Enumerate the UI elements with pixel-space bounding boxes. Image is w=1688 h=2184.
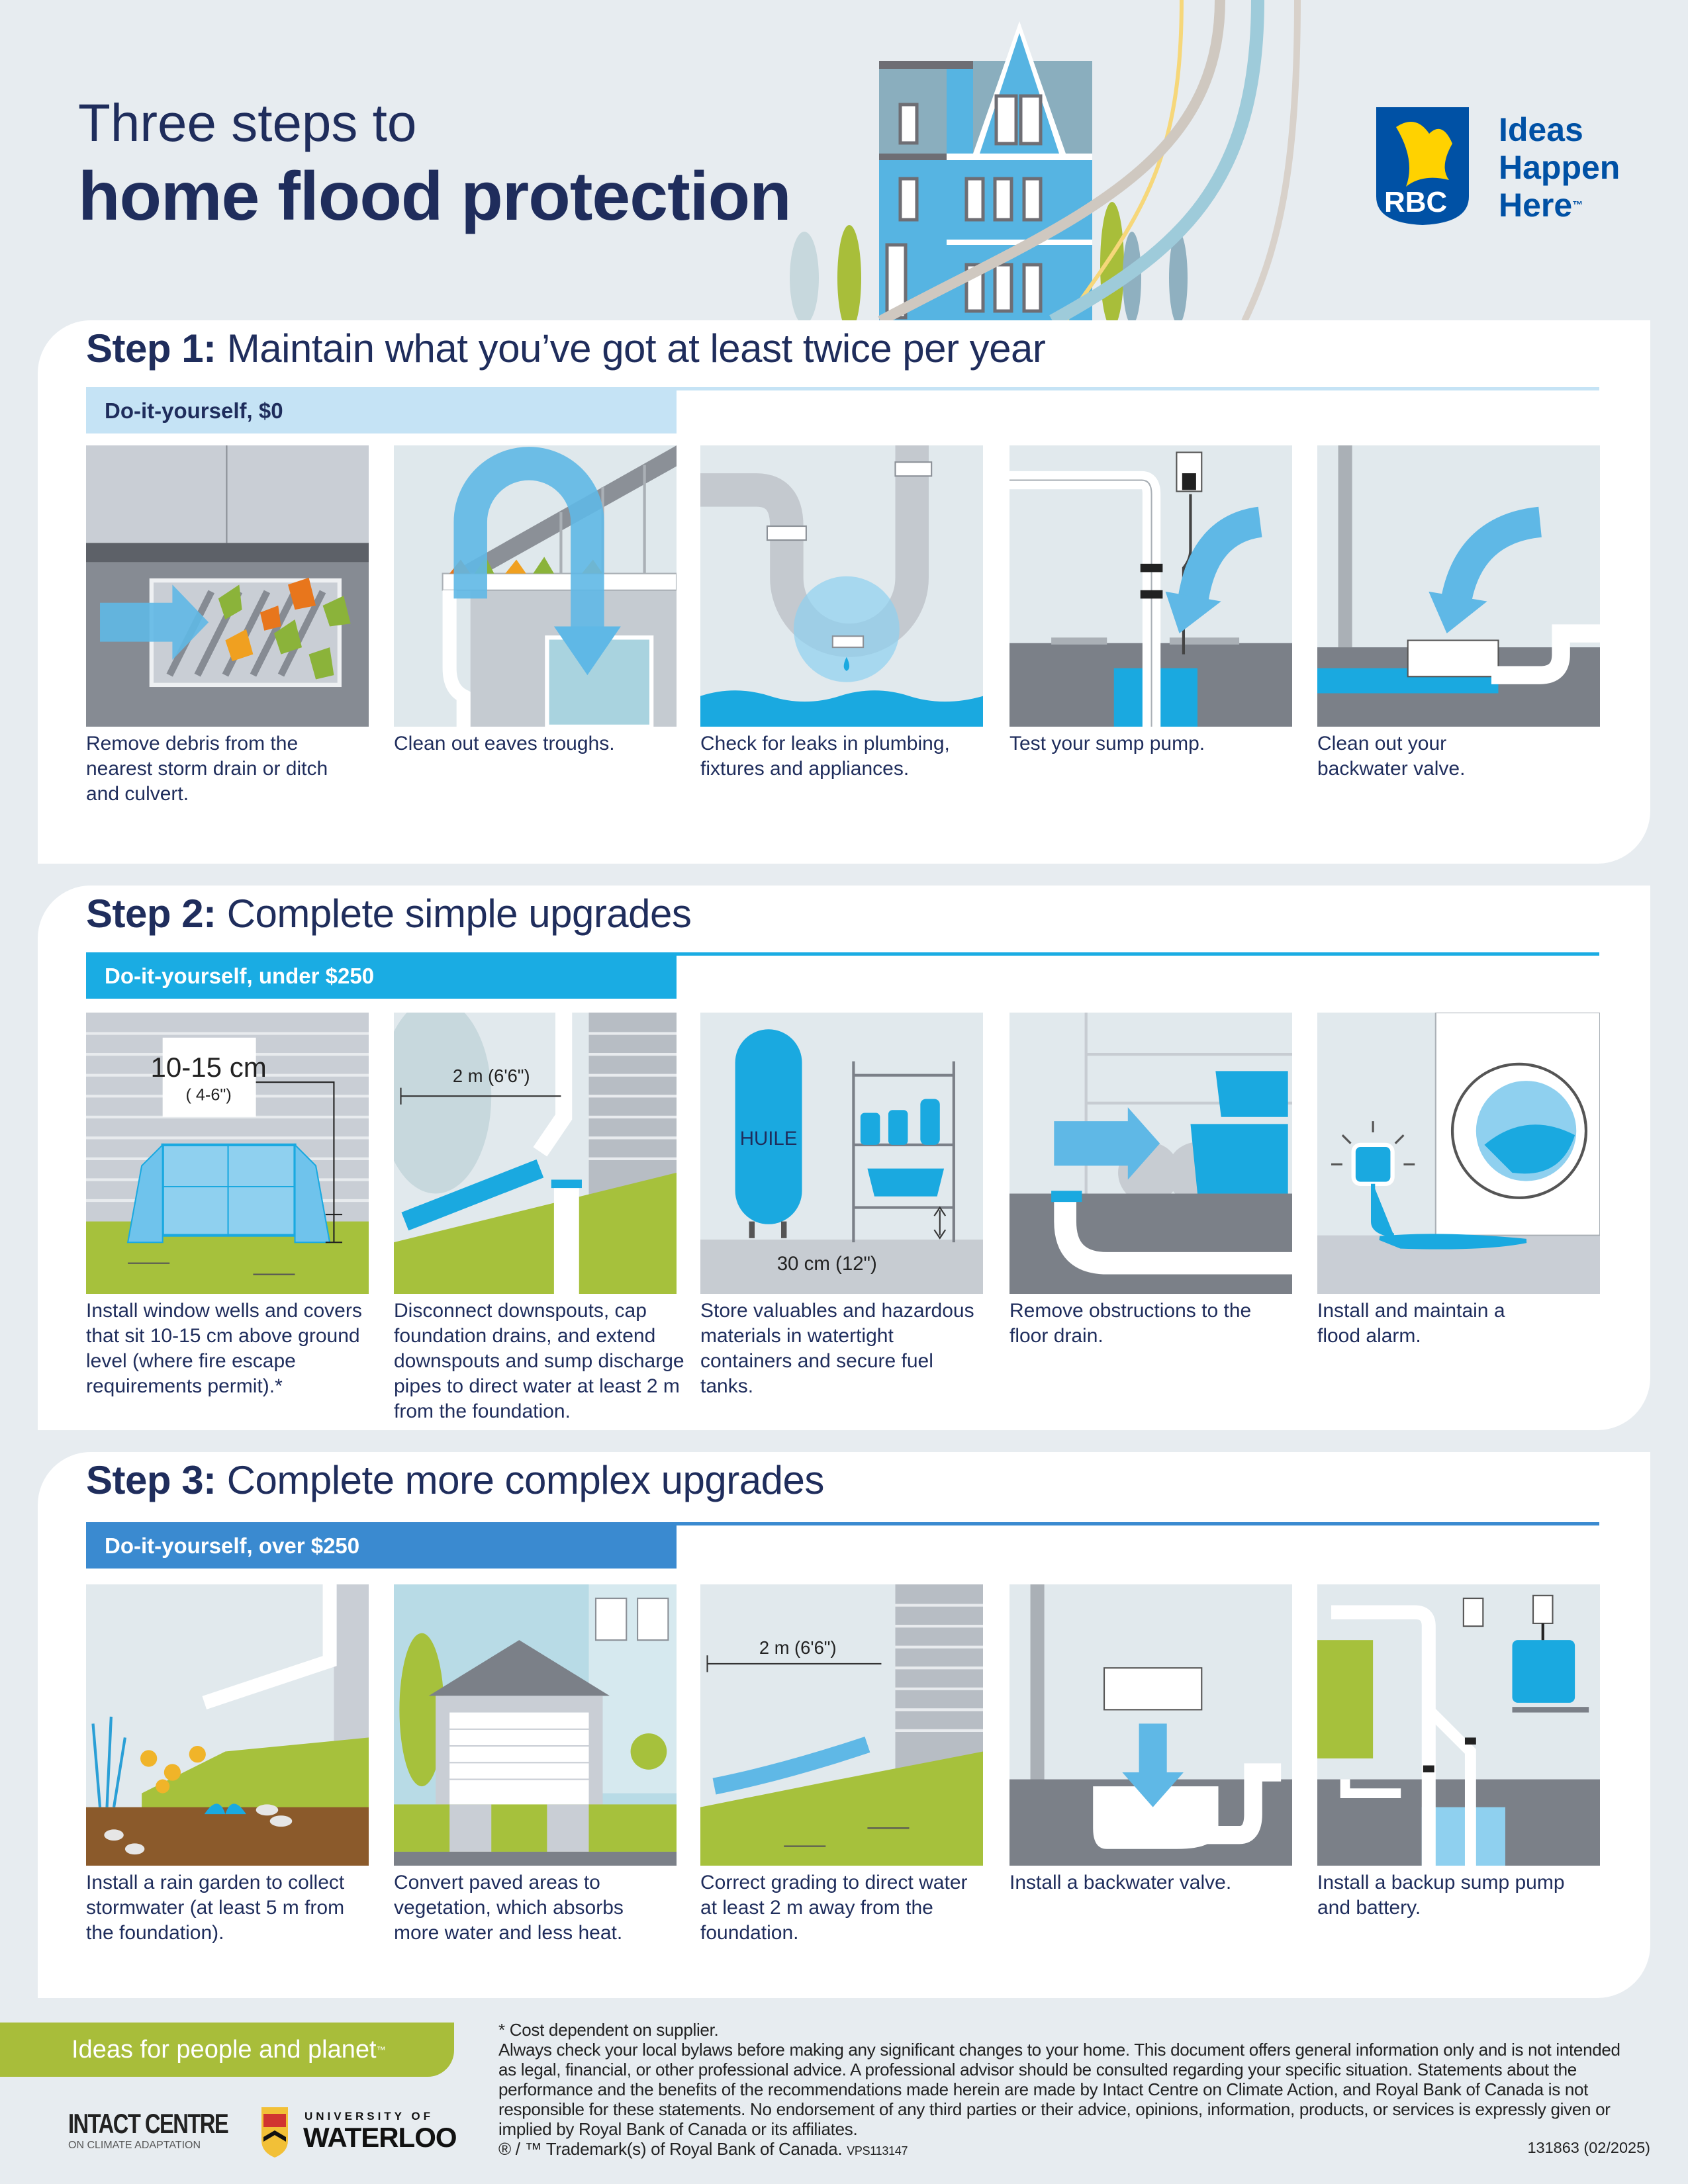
caption: Store valuables and hazardous materials in watertight containers and secure fuel tanks. xyxy=(700,1300,974,1397)
caption: Install window wells and covers that sit 10-15 cm above ground level (where fire escape requirements permit).* xyxy=(86,1300,362,1397)
logo: RBC: Happen xyxy=(1499,149,1620,186)
caption: Clean out your backwater valve. xyxy=(1317,733,1465,780)
caption: Install a backwater valve. xyxy=(1009,1872,1231,1893)
tile: rain garden xyxy=(86,1584,369,1866)
tile: downspouts: 2 m (6'6") xyxy=(453,1066,530,1086)
caption: Install and maintain a flood alarm. xyxy=(1317,1300,1505,1347)
caption: Check for leaks in plumbing, fixtures and appliances. xyxy=(700,733,950,780)
logo: RBC xyxy=(1376,107,1620,225)
tile: sump pump xyxy=(1009,445,1292,727)
tile: window wells: ( 4-6") xyxy=(185,1086,232,1105)
panel: step 2 xyxy=(38,886,1650,1430)
caption: Remove obstructions to the floor drain. xyxy=(1009,1300,1251,1347)
tile: plumbing leaks xyxy=(700,445,983,727)
logo: RBC: Here™ xyxy=(1499,187,1583,224)
heading: step 1: Step 1: Maintain what you’ve got at least twice per year xyxy=(86,326,1045,371)
tile: backup sump pump xyxy=(1317,1584,1600,1866)
tile: grading xyxy=(700,1584,983,1866)
logo: University of Waterloo: UNIVERSITY OF xyxy=(305,2110,434,2122)
caption: Clean out eaves troughs. xyxy=(394,733,615,754)
title: home flood protection xyxy=(78,158,791,235)
title xyxy=(78,93,791,235)
caption: Disconnect downspouts, cap foundation drains, and extend downspouts and sump discharge pipes to direct water at least 2 m from the foundation. xyxy=(394,1300,684,1422)
tile: window wells: 10-15 cm xyxy=(150,1052,267,1083)
fine print: ® / ™ Trademark(s) of Royal Bank of Canada. VPS113147 xyxy=(498,2139,908,2159)
tile: downspouts xyxy=(394,1013,677,1294)
footer tagline tab: Ideas for people and planet™ xyxy=(71,2036,386,2064)
logo: Intact Centre: INTACT CENTRE xyxy=(68,2108,228,2139)
tile: eaves troughs xyxy=(394,445,677,727)
heading: step 3: Step 3: Complete more complex upgrades xyxy=(86,1458,824,1502)
logo: Intact Centre: ON CLIMATE ADAPTATION xyxy=(68,2140,201,2151)
logo: RBC: RBC xyxy=(1384,186,1447,218)
caption: Remove debris from the nearest storm drain or ditch and culvert. xyxy=(86,733,328,805)
document code: 131863 (02/2025) xyxy=(1527,2139,1650,2156)
cost bar: step 1: Do-it-yourself, $0 xyxy=(105,398,283,423)
tile: store valuables xyxy=(700,1013,983,1294)
cost bar: step 1 xyxy=(86,388,677,433)
panel: step 3 xyxy=(38,1452,1650,1998)
heading: step 2: Step 2: Complete simple upgrades xyxy=(86,891,691,936)
tile: backwater valve xyxy=(1317,445,1600,727)
flowing lines xyxy=(880,0,1297,321)
header house illustration xyxy=(790,0,1301,320)
fine print: * Cost dependent on supplier. xyxy=(498,2020,718,2040)
caption: Test your sump pump. xyxy=(1009,733,1205,754)
tile: storm drain xyxy=(86,445,369,727)
tile: floor drain xyxy=(1009,1013,1292,1294)
cost bar: step 2 xyxy=(86,954,677,999)
tile: store valuables: HUILE xyxy=(740,1128,797,1150)
tile: grading: 2 m (6'6") xyxy=(759,1637,837,1658)
logo: RBC: Ideas xyxy=(1499,111,1583,148)
trees xyxy=(790,202,1188,331)
fine print: Always check your local bylaws before making any significant changes to your home. This document offers general information only and is not intended as legal, financial, or other professional advice. A professional advisor should be consulted regarding your specific situation. Statements about the performance and the benefits of the recommendations made herein are made by Intact Centre on Climate Action, and Royal Bank of Canada is not responsible for these statements. No endorsement of any third parties or their advice, opinions, information, products, or services is expressly given or implied by Royal Bank of Canada or its affiliates. xyxy=(498,2040,1620,2139)
tile: store valuables: 30 cm (12") xyxy=(777,1253,877,1275)
cost bar: step 3: Do-it-yourself, over $250 xyxy=(105,1533,359,1558)
caption: Install a rain garden to collect stormwater (at least 5 m from the foundation). xyxy=(86,1872,344,1944)
cost bar: step 2: Do-it-yourself, under $250 xyxy=(105,964,374,988)
logo: University of Waterloo: WATERLOO xyxy=(303,2122,457,2153)
logo: University of Waterloo xyxy=(261,2107,457,2158)
tile: window wells xyxy=(86,1013,369,1294)
tile: backwater valve install xyxy=(1009,1584,1292,1866)
caption: Install a backup sump pump and battery. xyxy=(1317,1872,1565,1919)
tile: convert paved areas xyxy=(394,1584,677,1866)
house body xyxy=(879,21,1092,322)
tile: flood alarm xyxy=(1317,1013,1600,1294)
title: Three steps to xyxy=(78,93,416,152)
caption: Correct grading to direct water at least 2 m away from the foundation. xyxy=(700,1872,968,1944)
panel: step 1 xyxy=(38,320,1650,864)
cost bar: step 3 xyxy=(86,1524,677,1569)
footer tagline tab xyxy=(0,2023,454,2077)
caption: Convert paved areas to vegetation, which absorbs more water and less heat. xyxy=(394,1872,624,1944)
